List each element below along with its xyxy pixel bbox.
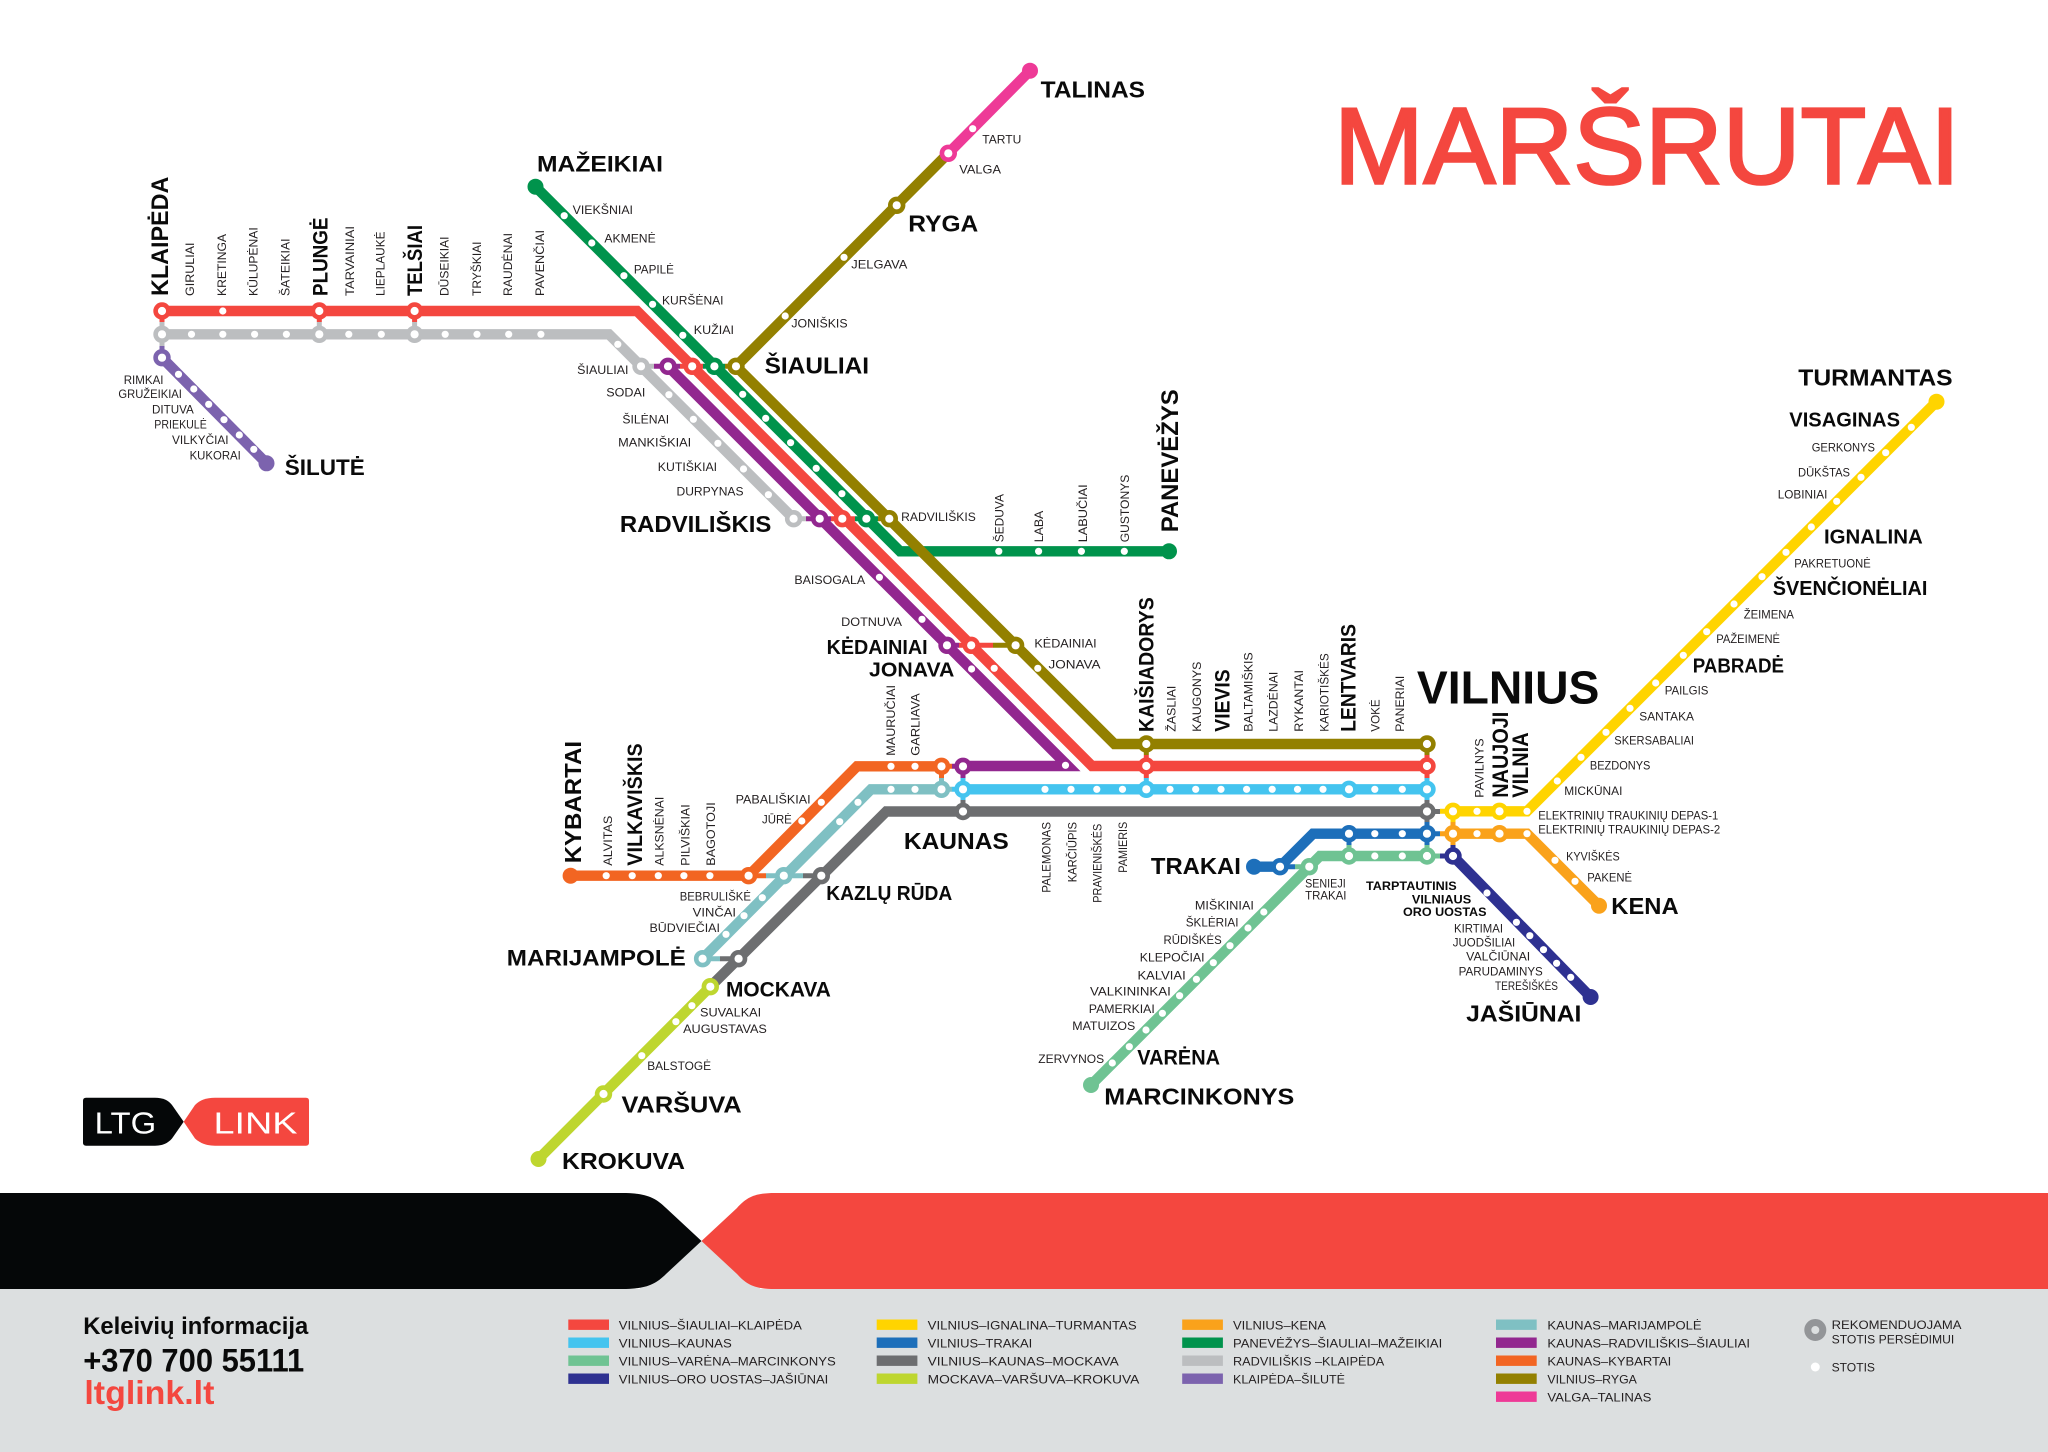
labels: Kena, Jašiūnai and Trakai stations: KALVIAI (1138, 968, 1186, 982)
passenger information (83, 1313, 309, 1411)
labels: Ignalina line: PAKRETUONĖ (1794, 556, 1871, 570)
legend: VILNIUS–ORO UOSTAS–JAŠIŪNAI (619, 1371, 828, 1386)
labels: Ignalina line: BEZDONYS (1590, 759, 1650, 773)
labels: major cities around Vilnius: TARPTAUTINIS (1366, 879, 1457, 893)
logo: LTG LINK: LINK (214, 1105, 298, 1140)
labels: Ignalina line: DŪKŠTAS (1798, 464, 1850, 479)
legend: REKOMENDUOJAMA (1832, 1318, 1962, 1332)
labels: Kena, Jašiūnai and Trakai stations: MIŠKINIAI (1195, 897, 1254, 912)
labels: Mažeikiai, Radviliškis, Šiauliai and Ryga stations: KURŠĖNAI (662, 292, 724, 308)
labels: Kaunas–Kybartai–Mockava stations: KARČIŪPIS (1064, 822, 1080, 882)
labels: Ignalina line: LOBINIAI (1778, 488, 1827, 502)
legend: KAUNAS–RADVILIŠKIS–ŠIAULIAI (1547, 1335, 1750, 1350)
labels: Mažeikiai, Radviliškis, Šiauliai and Ryga stations: VALGA (959, 162, 1001, 176)
line: Vilnius–Varėna–Marcinkonys (light green) (1083, 852, 1427, 1093)
labels: Kaunas–Kybartai–Mockava stations: BALSTOGĖ (647, 1059, 711, 1073)
labels: major cities on Klaipėda line: PLUNGĖ (310, 218, 333, 296)
labels: Šilutė line stations: DITUVA (152, 402, 194, 416)
labels: major cities south-west: KROKUVA (562, 1148, 685, 1174)
labels: Kaunas–Kybartai–Mockava stations: PRAVIENIŠKĖS (1089, 824, 1104, 903)
labels: Kena, Jašiūnai and Trakai stations: PARUDAMINYS (1459, 964, 1543, 978)
labels: Kaunas–Kybartai–Mockava stations: VINČAI (693, 905, 736, 920)
line: Radviliškis–Klaipėda (gray) (162, 331, 794, 519)
labels: major cities on Klaipėda line: RADVILIŠKIS (620, 510, 771, 537)
legend: KAUNAS–MARIJAMPOLĖ (1547, 1318, 1702, 1332)
labels: Kaunas–Kybartai–Mockava stations: PABALIŠKIAI (736, 792, 811, 807)
labels: Ignalina line major towns (1693, 365, 1953, 678)
labels: Kena, Jašiūnai and Trakai stations: KLEPOČIAI (1140, 949, 1204, 964)
labels: Klaipėda line vertical station names (183, 226, 547, 296)
labels: major cities on Klaipėda line: TELŠIAI (403, 225, 427, 296)
labels: Klaipėda line vertical station names: TARVAINIAI (343, 226, 357, 296)
labels: major cities on Klaipėda line: ŠIAULIAI (765, 351, 869, 378)
labels: Kaunas–Kybartai–Mockava stations: SUVALKAI (700, 1006, 761, 1020)
labels: Kaunas–Kybartai–Mockava stations: AUGUSTAVAS (683, 1022, 767, 1036)
labels: Klaipėda line vertical station names: DŪSEIKIAI (437, 236, 451, 296)
labels: major cities around Vilnius (1104, 597, 1679, 1110)
labels: Mažeikiai, Radviliškis, Šiauliai and Ryga stations: DURPYNAS (676, 485, 744, 499)
labels: Kaunas–Kybartai–Mockava stations: BŪDVIEČIAI (650, 920, 720, 935)
labels: Mažeikiai, Radviliškis, Šiauliai and Ryga stations: VIEKŠNIAI (573, 202, 633, 217)
legend: VILNIUS–IGNALINA–TURMANTAS (928, 1318, 1137, 1332)
labels: major cities on Klaipėda line (147, 76, 1184, 681)
labels: Kaišiadorys–Vilnius stations: RYKANTAI (1292, 670, 1306, 732)
line: Panevėžys–Šiauliai–Mažeikiai (green) (528, 179, 1177, 559)
labels: Mažeikiai, Radviliškis, Šiauliai and Ryga stations: ŠEDUVA (992, 494, 1007, 542)
legend: VILNIUS–ŠIAULIAI–KLAIPĖDA (619, 1317, 802, 1332)
labels: Ignalina line: SANTAKA (1639, 709, 1694, 723)
labels: Šilutė line stations: RIMKAI (124, 373, 164, 387)
legend: KLAIPĖDA–ŠILUTĖ (1233, 1371, 1345, 1386)
labels: Mažeikiai, Radviliškis, Šiauliai and Ryga stations (573, 132, 1132, 672)
legend: RADVILIŠKIS –KLAIPĖDA (1233, 1353, 1384, 1368)
legend: VILNIUS–KAUNAS–MOCKAVA (928, 1354, 1119, 1368)
labels: Ignalina line: SKERSABALIAI (1614, 733, 1694, 747)
labels: major cities around Vilnius: VILNIUS (1417, 661, 1599, 713)
labels: Kena, Jašiūnai and Trakai stations: ŠKLĖRIAI (1186, 914, 1238, 929)
passenger information: Keleivių informacija (83, 1313, 309, 1340)
labels: major cities south-west: KAUNAS (904, 828, 1009, 854)
red line dot near Jonava (991, 665, 998, 672)
line: Vilnius–Trakai (blue) (1246, 830, 1427, 875)
labels: Klaipėda line vertical station names: GIRULIAI (183, 242, 197, 296)
labels: Kaunas–Kybartai–Mockava stations: MAURUČIAI (883, 685, 898, 756)
labels: Mažeikiai, Radviliškis, Šiauliai and Ryga stations: JONIŠKIS (791, 315, 848, 330)
labels: Kena, Jašiūnai and Trakai stations: KIRTIMAI (1454, 921, 1503, 935)
labels: Kaunas–Kybartai–Mockava stations: GARLIAVA (909, 693, 923, 756)
line: Vilnius–Kena (orange) (1453, 830, 1607, 914)
legend: STOTIS (1832, 1361, 1875, 1375)
labels: Ignalina line major towns: TURMANTAS (1798, 365, 1953, 391)
line: Vilnius–oro uostas–Jašiūnai (navy) (1453, 856, 1599, 1005)
labels: major cities around Vilnius: VILNIA (1508, 732, 1533, 798)
legend: VILNIUS–VARĖNA–MARCINKONYS (619, 1354, 836, 1368)
labels: major cities on Klaipėda line: ŠILUTĖ (285, 455, 365, 480)
labels: major cities around Vilnius: TRAKAI (1151, 853, 1241, 879)
labels: Klaipėda line vertical station names: RAUDĖNAI (501, 233, 515, 296)
line: Vilnius–Kaunas (light blue) (963, 786, 1427, 793)
labels: Šilutė line stations: KUKORAI (190, 448, 241, 462)
passenger information: +370 700 55111 (83, 1343, 304, 1379)
labels: Mažeikiai, Radviliškis, Šiauliai and Ryga stations: LABA (1032, 511, 1046, 542)
labels: Kaunas–Kybartai–Mockava stations: ALVITAS (601, 816, 615, 866)
labels: Kaunas–Kybartai–Mockava stations: ALKSNĖNAI (653, 797, 667, 866)
line: Klaipėda–Šilutė (violet) (162, 358, 274, 471)
labels: Ignalina line: PAILGIS (1665, 683, 1708, 697)
labels: Ignalina line major towns: IGNALINA (1824, 527, 1923, 549)
line: Kaunas–Radviliškis–Šiauliai (purple) (668, 366, 1069, 769)
labels: major cities south-west: KYBARTAI (560, 741, 586, 863)
band: black and red (0, 1193, 2048, 1289)
labels: major cities around Vilnius: JAŠIŪNAI (1466, 1000, 1581, 1027)
labels: major cities on Klaipėda line: RYGA (908, 211, 978, 237)
legend: KAUNAS–KYBARTAI (1547, 1354, 1671, 1368)
labels: Mažeikiai, Radviliškis, Šiauliai and Ryga stations: TARTU (982, 132, 1021, 146)
logo: LTG LINK (83, 1098, 309, 1146)
transfer stations (rings) (156, 147, 1506, 1100)
labels: Kaišiadorys–Vilnius stations: ŽASLIAI (1163, 686, 1178, 732)
legend: VILNIUS–KAUNAS (619, 1336, 732, 1350)
labels: Ignalina line major towns: PABRADĖ (1693, 655, 1784, 678)
title: MARŠRUTAI (1334, 85, 1960, 207)
labels: Kena, Jašiūnai and Trakai stations: JUODŠILIAI (1453, 935, 1515, 950)
labels: Klaipėda line vertical station names: ŠATEIKIAI (277, 239, 292, 296)
labels: Mažeikiai, Radviliškis, Šiauliai and Ryga stations: JELGAVA (851, 258, 907, 272)
labels: Kena, Jašiūnai and Trakai stations (1038, 849, 1632, 1066)
legend: VILNIUS–TRAKAI (928, 1336, 1032, 1350)
labels: major cities around Vilnius: KAIŠIADORYS (1135, 597, 1159, 732)
labels: Kaunas–Kybartai–Mockava stations: PILVIŠKIAI (677, 804, 692, 866)
labels: Ignalina line: ELEKTRINIŲ TRAUKINIŲ DEPAS-1 (1538, 809, 1719, 823)
labels: Kaišiadorys–Vilnius stations: VOKĖ (1368, 699, 1382, 732)
labels: major cities on Klaipėda line: MAŽEIKIAI (537, 152, 663, 176)
labels: Ignalina line: PAŽEIMENĖ (1716, 631, 1780, 646)
labels: Kena, Jašiūnai and Trakai stations: SENIEJI (1305, 877, 1346, 891)
legend: VALGA–TALINAS (1547, 1390, 1651, 1404)
labels: Kaunas–Kybartai–Mockava stations: PAMIERIS (1116, 822, 1130, 873)
labels: Šilutė line stations (118, 373, 241, 462)
labels: major cities south-west (507, 741, 1009, 1174)
labels: Ignalina line: ŽEIMENA (1744, 606, 1794, 621)
labels: Kaunas–Kybartai–Mockava stations: PALEMONAS (1040, 822, 1054, 893)
labels: major cities on Klaipėda line: KĖDAINIAI (827, 636, 928, 659)
labels: Kaunas–Kybartai–Mockava stations (601, 685, 1130, 1073)
labels: Mažeikiai, Radviliškis, Šiauliai and Ryga stations: RADVILIŠKIS (901, 509, 976, 524)
labels: Mažeikiai, Radviliškis, Šiauliai and Ryga stations: GUSTONYS (1118, 475, 1132, 542)
labels: Kena, Jašiūnai and Trakai stations: ZERVYNOS (1038, 1052, 1104, 1066)
legend: PANEVĖŽYS–ŠIAULIAI–MAŽEIKIAI (1233, 1335, 1442, 1350)
labels: major cities south-west: MARIJAMPOLĖ (507, 945, 686, 970)
labels: Mažeikiai, Radviliškis, Šiauliai and Ryga stations: KUTIŠKIAI (658, 459, 717, 474)
labels: Kaišiadorys–Vilnius stations (1163, 652, 1486, 798)
labels: major cities around Vilnius: VILNIAUS (1412, 892, 1471, 906)
labels: Ignalina line major towns: ŠVENČIONĖLIAI (1773, 576, 1927, 600)
labels: Mažeikiai, Radviliškis, Šiauliai and Ryga stations: LABUČIAI (1075, 484, 1090, 542)
legend: VILNIUS–RYGA (1547, 1372, 1637, 1386)
labels: Kaišiadorys–Vilnius stations: PAVILNYS (1472, 738, 1486, 798)
labels: Klaipėda line vertical station names: KŪLUPĖNAI (246, 227, 260, 296)
labels: major cities around Vilnius: MARCINKONYS (1104, 1084, 1294, 1110)
labels: Kena, Jašiūnai and Trakai stations: TEREŠIŠKĖS (1495, 978, 1558, 993)
labels: Kena, Jašiūnai and Trakai stations: MATUIZOS (1072, 1019, 1135, 1033)
line: Mockava–Varšuva–Krokuva (lime) (530, 987, 710, 1167)
line: Vilnius–Ignalina–Turmantas (yellow) (1453, 394, 1944, 815)
labels: Klaipėda line vertical station names: KRETINGA (215, 234, 229, 296)
labels: Kena, Jašiūnai and Trakai stations: RŪDIŠKĖS (1164, 932, 1222, 947)
legend: STOTIS PERSĖDIMUI (1832, 1333, 1954, 1347)
labels: major cities on Klaipėda line: TALINAS (1041, 76, 1145, 102)
labels: Kena, Jašiūnai and Trakai stations: PAMERKIAI (1089, 1002, 1155, 1016)
labels: Šilutė line stations: VILKYČIAI (172, 432, 229, 447)
labels: Ignalina line (1538, 440, 1875, 836)
labels: major cities south-west: VARŠUVA (622, 1091, 742, 1118)
labels: Kaišiadorys–Vilnius stations: KAUGONYS (1190, 662, 1204, 732)
line: Vilnius–Šiauliai–Klaipėda (red) (162, 307, 1427, 766)
labels: Mažeikiai, Radviliškis, Šiauliai and Ryga stations: ŠILĖNAI (622, 411, 669, 426)
labels: Mažeikiai, Radviliškis, Šiauliai and Ryga stations: AKMENĖ (604, 231, 656, 245)
labels: major cities south-west: KAZLŲ RŪDA (826, 883, 952, 905)
legend: VILNIUS–KENA (1233, 1318, 1326, 1332)
legend: MOCKAVA–VARŠUVA–KROKUVA (928, 1371, 1139, 1386)
legend (568, 1317, 1961, 1404)
labels: Kaišiadorys–Vilnius stations: LAZDĖNAI (1267, 672, 1281, 732)
labels: Šilutė line stations: GRUŽEIKIAI (118, 386, 182, 401)
labels: major cities around Vilnius: VIEVIS (1211, 669, 1234, 732)
line: Vilnius–Kaunas–Mockava (dark gray) (710, 812, 1427, 987)
labels: Klaipėda line vertical station names: PAVENČIAI (532, 230, 547, 296)
footer background (0, 1289, 2048, 1452)
labels: Kaišiadorys–Vilnius stations: BALTAMIŠKIS (1240, 652, 1255, 732)
labels: Kaišiadorys–Vilnius stations: PANERIAI (1393, 676, 1407, 732)
line: Valga–Talinas (pink) (948, 63, 1038, 153)
labels: Mažeikiai, Radviliškis, Šiauliai and Ryga stations: DOTNUVA (841, 615, 902, 629)
labels: Mažeikiai, Radviliškis, Šiauliai and Ryga stations: ŠIAULIAI (577, 362, 628, 377)
labels: Ignalina line: GERKONYS (1812, 440, 1875, 454)
labels: Kaunas–Kybartai–Mockava stations: JŪRĖ (762, 812, 792, 826)
labels: Kena, Jašiūnai and Trakai stations: VALKININKAI (1090, 984, 1171, 998)
labels: Mažeikiai, Radviliškis, Šiauliai and Ryga stations: PAPILĖ (634, 262, 674, 276)
labels: major cities around Vilnius: VARĖNA (1137, 1047, 1220, 1070)
line: Vilnius–Ryga (olive) (736, 153, 1427, 744)
transfer connectors between lines (162, 311, 1453, 959)
labels: Kena, Jašiūnai and Trakai stations: TRAKAI (1305, 888, 1346, 902)
line: Kaunas–Kybartai (orange-red) (563, 763, 942, 884)
labels: Kaunas–Kybartai–Mockava stations: BAGOTOJI (704, 802, 718, 866)
labels: Ignalina line: MICKŪNAI (1564, 784, 1622, 798)
labels: major cities around Vilnius: LENTVARIS (1337, 624, 1360, 732)
labels: Kena, Jašiūnai and Trakai stations: KYVIŠKĖS (1566, 849, 1620, 864)
labels: major cities around Vilnius: KENA (1611, 893, 1679, 919)
labels: Šilutė line stations: PRIEKULĖ (154, 417, 207, 431)
labels: Mažeikiai, Radviliškis, Šiauliai and Ryga stations: BAISOGALA (794, 573, 865, 587)
labels: Ignalina line major towns: VISAGINAS (1789, 409, 1900, 431)
labels: Mažeikiai, Radviliškis, Šiauliai and Ryga stations: KUŽIAI (694, 322, 734, 337)
line: Kaunas–Marijampolė (teal) (703, 786, 942, 959)
passenger information: ltglink.lt (84, 1374, 214, 1411)
labels: major cities on Klaipėda line: KLAIPĖDA (147, 177, 174, 296)
labels: Kena, Jašiūnai and Trakai stations: PAKENĖ (1587, 871, 1632, 885)
labels: Kaišiadorys–Vilnius stations: KARIOTIŠKĖS (1316, 653, 1332, 732)
labels: Ignalina line: ELEKTRINIŲ TRAUKINIŲ DEPAS-2 (1538, 822, 1721, 836)
labels: Mažeikiai, Radviliškis, Šiauliai and Ryga stations: SODAI (606, 386, 645, 400)
labels: major cities on Klaipėda line: PANEVĖŽYS (1156, 389, 1184, 532)
logo: LTG LINK: LTG (95, 1105, 156, 1140)
labels: major cities south-west: MOCKAVA (726, 979, 831, 1002)
labels: Mažeikiai, Radviliškis, Šiauliai and Ryga stations: MANKIŠKIAI (618, 435, 691, 450)
labels: Mažeikiai, Radviliškis, Šiauliai and Ryga stations: KĖDAINIAI (1034, 637, 1097, 651)
labels: Kaunas–Kybartai–Mockava stations: BEBRULIŠKĖ (680, 888, 751, 903)
labels: major cities south-west: VILKAVIŠKIS (623, 743, 647, 866)
labels: Klaipėda line vertical station names: LIEPLAUKĖ (374, 232, 388, 296)
labels: Klaipėda line vertical station names: TRYŠKIAI (469, 242, 484, 296)
labels: Mažeikiai, Radviliškis, Šiauliai and Ryga stations: JONAVA (1048, 658, 1100, 672)
labels: major cities around Vilnius: NAUJOJI (1488, 712, 1513, 798)
labels: major cities around Vilnius: ORO UOSTAS (1403, 905, 1486, 919)
labels: Kena, Jašiūnai and Trakai stations: VALČIŪNAI (1466, 949, 1530, 964)
labels: major cities on Klaipėda line: JONAVA (869, 659, 954, 681)
